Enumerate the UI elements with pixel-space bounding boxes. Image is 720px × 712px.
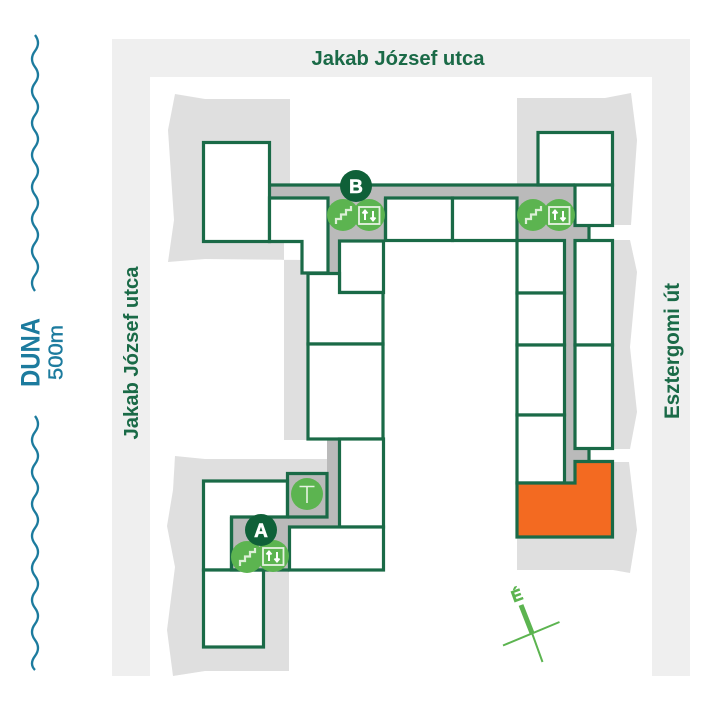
staircase A icons [231,540,289,573]
street label top: Jakab József utca [312,47,485,70]
green areas: light grey surroundings [167,93,637,676]
street label left: Jakab József utca [120,266,143,440]
entrance badge B [340,170,372,202]
label: DUNA: DUNA [16,318,46,387]
street label right: Esztergomi út [661,283,684,419]
entrance badge A: A [254,521,268,542]
corridors [231,185,589,570]
wing: north-west stepped room [270,198,328,273]
wing: east outer rooms [575,240,612,448]
north compass: É [509,584,525,606]
building wings [204,132,612,647]
river wave south [32,416,38,670]
wing: east inner rooms [517,240,564,483]
wing: south-west rooms [204,481,288,647]
staircase B icons [327,199,385,231]
wing: north-east rooms [538,132,612,226]
entrance badge B: B [349,177,363,198]
wing: central rooms [290,241,384,570]
staircase east icons [517,199,575,231]
highlighted orange unit [517,462,612,537]
wing: north strip rooms [386,198,517,240]
river wave north [32,35,38,291]
icon: T circle [291,478,323,510]
wing: north-west block [204,142,270,242]
entrance badge A [245,514,277,546]
label: 500m: 500m [46,325,68,380]
corridor outlines [232,185,589,570]
north compass [503,584,560,662]
street frame [112,39,690,676]
